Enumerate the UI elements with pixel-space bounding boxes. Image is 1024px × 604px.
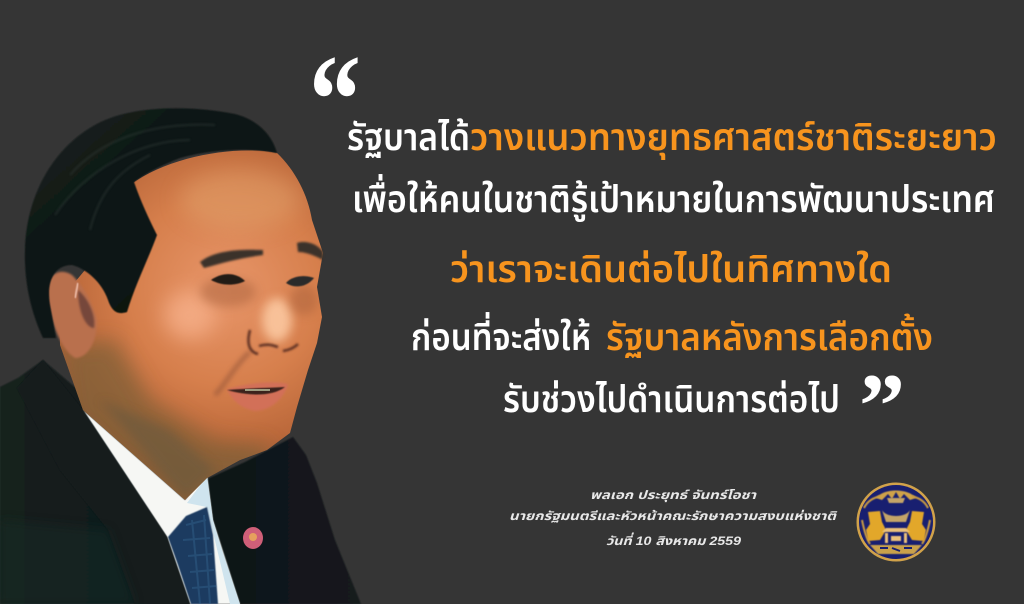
quote line 4: ก่อนที่จะส่งให้ <box>411 312 591 358</box>
face <box>60 150 323 500</box>
lapel pin <box>243 527 263 549</box>
teeth <box>245 389 270 391</box>
right eyebrow <box>297 242 323 260</box>
jaw shadow <box>60 340 270 510</box>
mouth opening <box>227 387 285 395</box>
quote line 4 <box>411 312 933 358</box>
necktie <box>168 507 218 604</box>
jacket left lapel <box>17 360 190 604</box>
nasolabial shadow <box>215 352 250 395</box>
forehead light <box>180 170 300 230</box>
seal flame border <box>876 490 916 500</box>
seal bowl <box>882 498 910 522</box>
hair sheen <box>55 125 215 230</box>
shirt <box>83 410 240 604</box>
quote line 4: รัฐบาลหลังการเลือกตั้ง <box>606 314 933 358</box>
opening quotation mark: “ <box>309 30 361 172</box>
attribution title: นายกรัฐมนตรีและหัวหน้าคณะรักษาความสงบแห่งชาติ <box>509 509 838 523</box>
quote line 1: วางแนวทางยุทธศาสตร์ชาติระยะยาว <box>470 117 997 160</box>
attribution date: วันที่ 10 สิงหาคม 2559 <box>606 532 741 548</box>
closing quotation mark: ” <box>859 355 905 457</box>
attribution name: พลเอก ประยุทธ์ จันทร์โอชา <box>590 488 757 503</box>
seal right lion <box>906 511 926 541</box>
quote line 5: รับช่วงไปดำเนินการต่อไป <box>503 379 840 420</box>
mouth <box>227 382 288 411</box>
tie pattern <box>183 515 216 604</box>
right eye socket <box>290 285 318 315</box>
cheek highlight <box>164 291 216 339</box>
pale blue shirt front <box>187 476 240 604</box>
quote line 3: ว่าเราจะเดินต่อไปในทิศทางใด <box>450 249 892 290</box>
right eye <box>286 276 314 286</box>
hair <box>25 108 277 338</box>
government seal <box>856 482 936 562</box>
suit jacket <box>0 360 361 604</box>
seal side scrolls <box>862 496 930 544</box>
seal left lion <box>866 511 886 541</box>
neck shadow <box>108 404 212 498</box>
seal base cutouts <box>880 548 912 551</box>
left eye <box>211 274 245 285</box>
ear highlight <box>75 283 78 298</box>
seal base pattern <box>870 545 922 554</box>
inner ear <box>78 290 94 328</box>
nose <box>248 330 298 354</box>
nose highlight <box>262 298 292 342</box>
quote line 1: รัฐบาลได้ <box>347 117 470 158</box>
ear <box>47 272 97 358</box>
attribution <box>509 488 838 548</box>
left eyebrow <box>200 250 263 268</box>
jacket sleeve tint <box>0 520 135 604</box>
eye socket shadow <box>200 277 256 307</box>
seal table <box>882 528 910 543</box>
portrait photo <box>0 108 361 604</box>
